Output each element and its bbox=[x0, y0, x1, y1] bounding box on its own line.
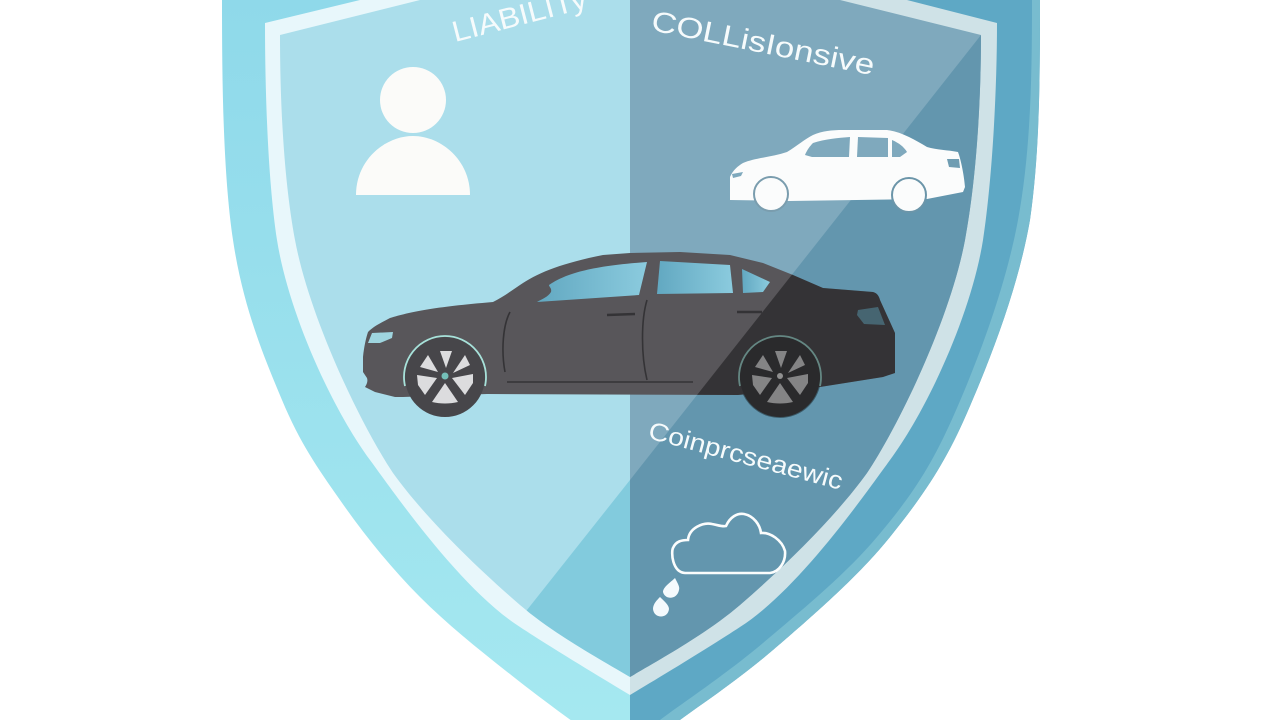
rear wheel bbox=[739, 336, 821, 417]
outer shield band bbox=[200, 0, 1060, 720]
label: comprehensive: Coinprcseaewic bbox=[645, 417, 846, 496]
panel: collision bbox=[630, 0, 990, 700]
shield inner panels bbox=[270, 0, 1000, 700]
icon: white car bbox=[730, 130, 965, 212]
panel: lower left shade bbox=[526, 480, 630, 677]
icon: main dark car bbox=[363, 252, 895, 418]
car windows bbox=[537, 261, 770, 302]
front wheel bbox=[404, 336, 486, 417]
icon: rain drops bbox=[653, 578, 679, 616]
icon: cloud bbox=[672, 514, 785, 573]
car shadow overlay bbox=[697, 274, 895, 418]
label: collision: COLLisIonsive bbox=[649, 6, 877, 82]
white shield stripe bbox=[265, 0, 997, 695]
panel: comprehensive bbox=[630, 35, 1000, 700]
icon: person bbox=[356, 67, 470, 195]
panel: liability bbox=[270, 0, 630, 700]
shield infographic bbox=[222, 0, 1040, 720]
car lights bbox=[368, 307, 885, 343]
car door lines bbox=[503, 300, 762, 382]
car body bbox=[363, 252, 895, 397]
